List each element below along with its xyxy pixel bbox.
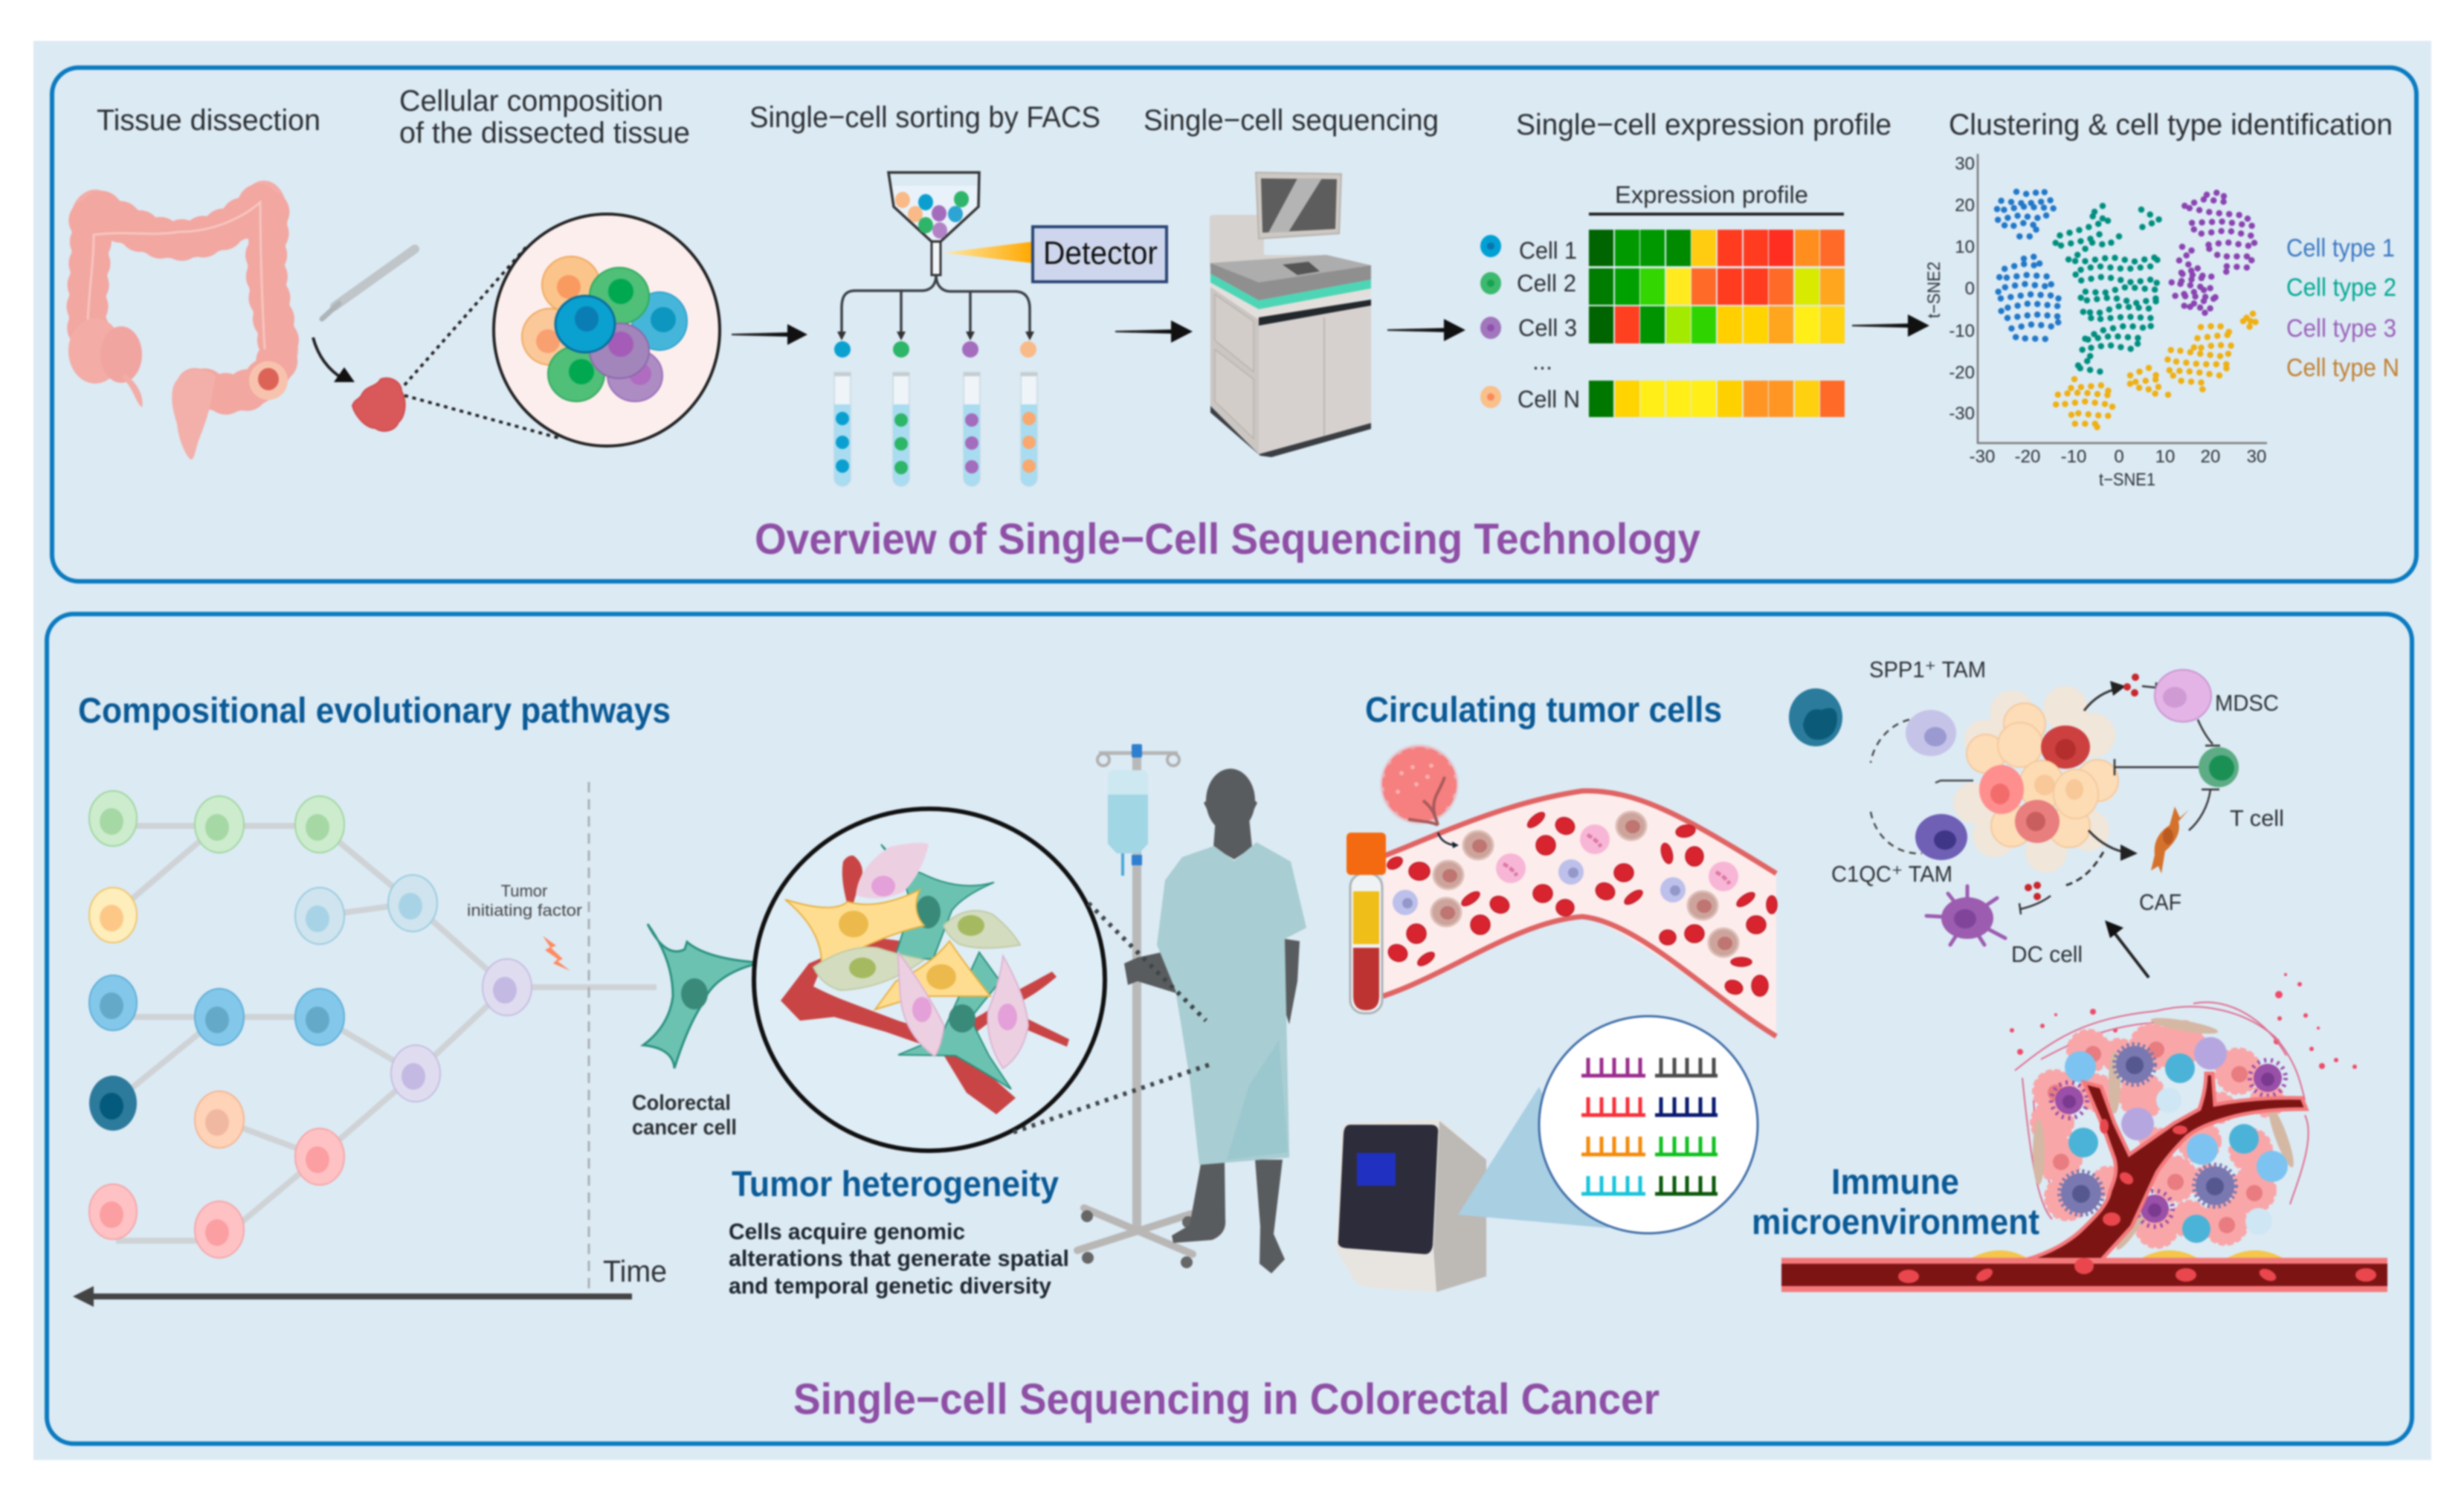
heading: cellular composition: of the dissected tissue xyxy=(399,117,690,149)
title: overview: Overview of Single−Cell Sequencing Technology xyxy=(755,515,1700,563)
chart: t-SNE scatter: -30 xyxy=(1949,404,1975,424)
legend: cells: Cell 1 xyxy=(1519,237,1577,264)
arrow: tumour to MDSC xyxy=(2084,674,2156,711)
icon: SPP1 TAM xyxy=(1906,710,1956,756)
heatmap: expression profile: Expression profile xyxy=(1615,181,1808,208)
heading: immune microenvironment xyxy=(1752,1163,2039,1242)
arrow: sorting to sequencer xyxy=(1115,320,1193,343)
chart: t-SNE scatter: 30 xyxy=(2247,447,2266,467)
zoom lines to patient xyxy=(1013,903,1210,1132)
icon: cellular composition circle xyxy=(494,214,720,446)
icon: tumour cluster xyxy=(1953,686,2118,873)
heading: tumor heterogeneity: Tumor heterogeneity xyxy=(732,1165,1059,1204)
icon: patient xyxy=(1124,769,1306,1273)
icon: sequencer box xyxy=(1336,1120,1486,1292)
heading: cellular composition: Cellular composition xyxy=(399,85,663,117)
extracellular fibres xyxy=(2015,1002,2309,1219)
heading: immune microenvironment: Immune xyxy=(1831,1163,1959,1202)
time axis xyxy=(73,782,667,1307)
heading: compositional evolutionary pathways: Compositional evolutionary pathways xyxy=(78,691,671,731)
chart: t-SNE scatter: 20 xyxy=(1955,196,1975,216)
chart: t-SNE scatter: -20 xyxy=(2015,447,2040,467)
main blood vessel xyxy=(1781,1258,2387,1292)
panel: single-cell sequencing in colorectal cancer xyxy=(47,614,2412,1444)
icon: monocyte xyxy=(1789,688,1842,746)
label: tumor initiating factor: Tumor xyxy=(501,882,547,900)
chart: t-SNE scatter: 0 xyxy=(2114,447,2124,467)
title: colorectal cancer: Single−cell Sequencing in Colorectal Cancer xyxy=(793,1375,1660,1424)
legend: cell types: Cell type 1 xyxy=(2286,234,2395,262)
icon: scalpel xyxy=(322,249,415,319)
zoom lines to tissue circle xyxy=(404,247,558,438)
lilac cells xyxy=(1393,859,1686,915)
heading: cellular composition xyxy=(399,85,690,149)
chart: t-SNE scatter: 20 xyxy=(2201,447,2220,467)
dendritic cells xyxy=(2051,1060,2286,1227)
chart: t-SNE scatter: t−SNE2 xyxy=(1924,262,1944,318)
icon: IV stand xyxy=(1077,744,1194,1268)
legend: cells: Cell 3 xyxy=(1518,314,1577,341)
icon: T cell xyxy=(2199,747,2239,787)
lymphocytes xyxy=(2065,1037,2288,1243)
heading: clustering: Clustering & cell type identification xyxy=(1949,109,2393,141)
icon: CAF xyxy=(2151,807,2189,873)
icon: blood tube xyxy=(1347,833,1386,1013)
tumour cells xyxy=(2031,1021,2284,1247)
icon: C1QC TAM xyxy=(1915,814,1967,860)
heading: FACS sorting: Single−cell sorting by FACS xyxy=(749,101,1100,134)
chart: t-SNE scatter: 10 xyxy=(2155,447,2175,467)
chart: t-SNE scatter: 10 xyxy=(1955,237,1975,257)
legend: cell types: Cell type 3 xyxy=(2286,314,2396,343)
blood vessels xyxy=(781,856,1069,1114)
icon: dissected tumour xyxy=(352,378,405,431)
arrow: tumour to DC xyxy=(2019,852,2103,914)
legend: cell types: Cell type 2 xyxy=(2286,274,2396,302)
dashed polarisation arcs xyxy=(1871,720,1973,853)
text: heterogeneity description: Cells acquire genomic xyxy=(729,1218,965,1244)
icon: sequencing machine xyxy=(1210,172,1371,457)
icon: DC cell xyxy=(1926,886,2005,945)
text: heterogeneity description xyxy=(729,1218,1069,1299)
label: tumor initiating factor xyxy=(467,882,582,920)
scatter: cell type 1 xyxy=(1996,190,2061,339)
pericytes on vessel xyxy=(1972,1250,2283,1258)
detector box xyxy=(1033,227,1167,282)
inhibition: CAF to T cell xyxy=(2189,789,2219,830)
arrow: tumour to CAF xyxy=(2089,830,2138,861)
fibroblasts xyxy=(2033,1015,2298,1253)
chart: t-SNE scatter xyxy=(1924,154,2399,490)
legend: cell types: Cell type N xyxy=(2286,354,2399,382)
icon: colon xyxy=(68,199,288,459)
label: colorectal cancer cell: cancer cell xyxy=(632,1116,737,1140)
label: tumor initiating factor: initiating factor xyxy=(467,901,582,920)
legend: cell types xyxy=(2286,234,2399,382)
spiky macrophages xyxy=(2060,1045,2235,1214)
neutrophils xyxy=(1496,824,1738,891)
legend: cells: ... xyxy=(1532,348,1552,375)
arrow: scalpel to tumour xyxy=(313,337,355,382)
diagram: evolutionary tree xyxy=(89,791,657,1258)
time axis: Time xyxy=(603,1254,667,1288)
blood vessel branches xyxy=(2025,1073,2306,1260)
arrow: profile to clustering xyxy=(1852,314,1929,337)
heading: immune microenvironment: microenvironment xyxy=(1752,1203,2039,1242)
icon: lightning xyxy=(543,936,570,971)
inhibition: MDSC to T cell xyxy=(2198,720,2220,746)
text: heterogeneity description: and temporal genetic diversity xyxy=(729,1273,1052,1299)
icon: FACS sorter xyxy=(834,172,1167,486)
heatmap: expression profile xyxy=(1589,181,1845,417)
icon: colorectal cancer cell xyxy=(643,924,761,1068)
heading: sequencing: Single−cell sequencing xyxy=(1144,104,1439,137)
heading: tissue dissection: Tissue dissection xyxy=(97,104,320,137)
legend: cells: Cell N xyxy=(1518,386,1580,413)
red blood cells xyxy=(1385,810,1777,997)
arrow: microenvironment to interactions xyxy=(2105,920,2149,978)
scatter: cell type 3 xyxy=(2171,192,2254,315)
chart: t-SNE scatter: -10 xyxy=(1949,321,1975,341)
inhibition: T cell to tumour xyxy=(2115,759,2199,775)
icon: sequencing beam xyxy=(1458,1087,1609,1228)
scatter: cell type 2 xyxy=(2055,206,2160,372)
arrow: sequencer to profile xyxy=(1387,319,1465,341)
chart: t-SNE scatter: -20 xyxy=(1949,363,1975,383)
chart: t-SNE scatter: -30 xyxy=(1970,447,1995,467)
chart: t-SNE scatter: -10 xyxy=(2061,447,2086,467)
text: heterogeneity description: alterations that generate spatial xyxy=(729,1245,1069,1271)
legend: cells: Cell 2 xyxy=(1517,270,1576,297)
icon: sequencing reads lens xyxy=(1539,1016,1758,1233)
label: colorectal cancer cell xyxy=(632,1091,737,1140)
icon: MDSC xyxy=(2155,670,2211,722)
label: MDSC: MDSC xyxy=(2215,690,2279,716)
pale tumor cells xyxy=(1431,812,1738,957)
icon: blood vessel with cells xyxy=(1383,791,1777,1036)
chart: t-SNE scatter: 30 xyxy=(1955,154,1975,174)
icon: primary tumour shedding cells xyxy=(1379,743,1460,848)
scatter: cell type N xyxy=(2056,314,2257,431)
chart: t-SNE scatter: t−SNE1 xyxy=(2099,470,2155,490)
label: T cell: T cell xyxy=(2230,805,2284,831)
icon: tumour microenvironment xyxy=(1781,973,2387,1292)
label: CAF: CAF xyxy=(2139,889,2181,915)
label: C1QC TAM: C1QC⁺ TAM xyxy=(1831,861,1952,887)
detector box: Detector xyxy=(1043,235,1158,271)
heading: circulating tumor cells: Circulating tumor cells xyxy=(1365,691,1722,730)
arrow: tissue to sorting xyxy=(732,324,807,345)
label: SPP1 TAM: SPP1⁺ TAM xyxy=(1869,656,1986,682)
heading: expression profile: Single−cell expression profile xyxy=(1516,109,1891,141)
icon: test tubes xyxy=(834,372,1037,486)
cytokine dots xyxy=(2010,973,2357,1069)
legend: cells xyxy=(1480,235,1580,413)
diagram: immune cell interactions xyxy=(1789,656,2284,978)
icon: tumor heterogeneity lens xyxy=(754,809,1105,1151)
label: colorectal cancer cell: Colorectal xyxy=(632,1091,731,1115)
label: DC cell: DC cell xyxy=(2011,941,2083,967)
chart: t-SNE scatter: 0 xyxy=(1965,279,1975,299)
